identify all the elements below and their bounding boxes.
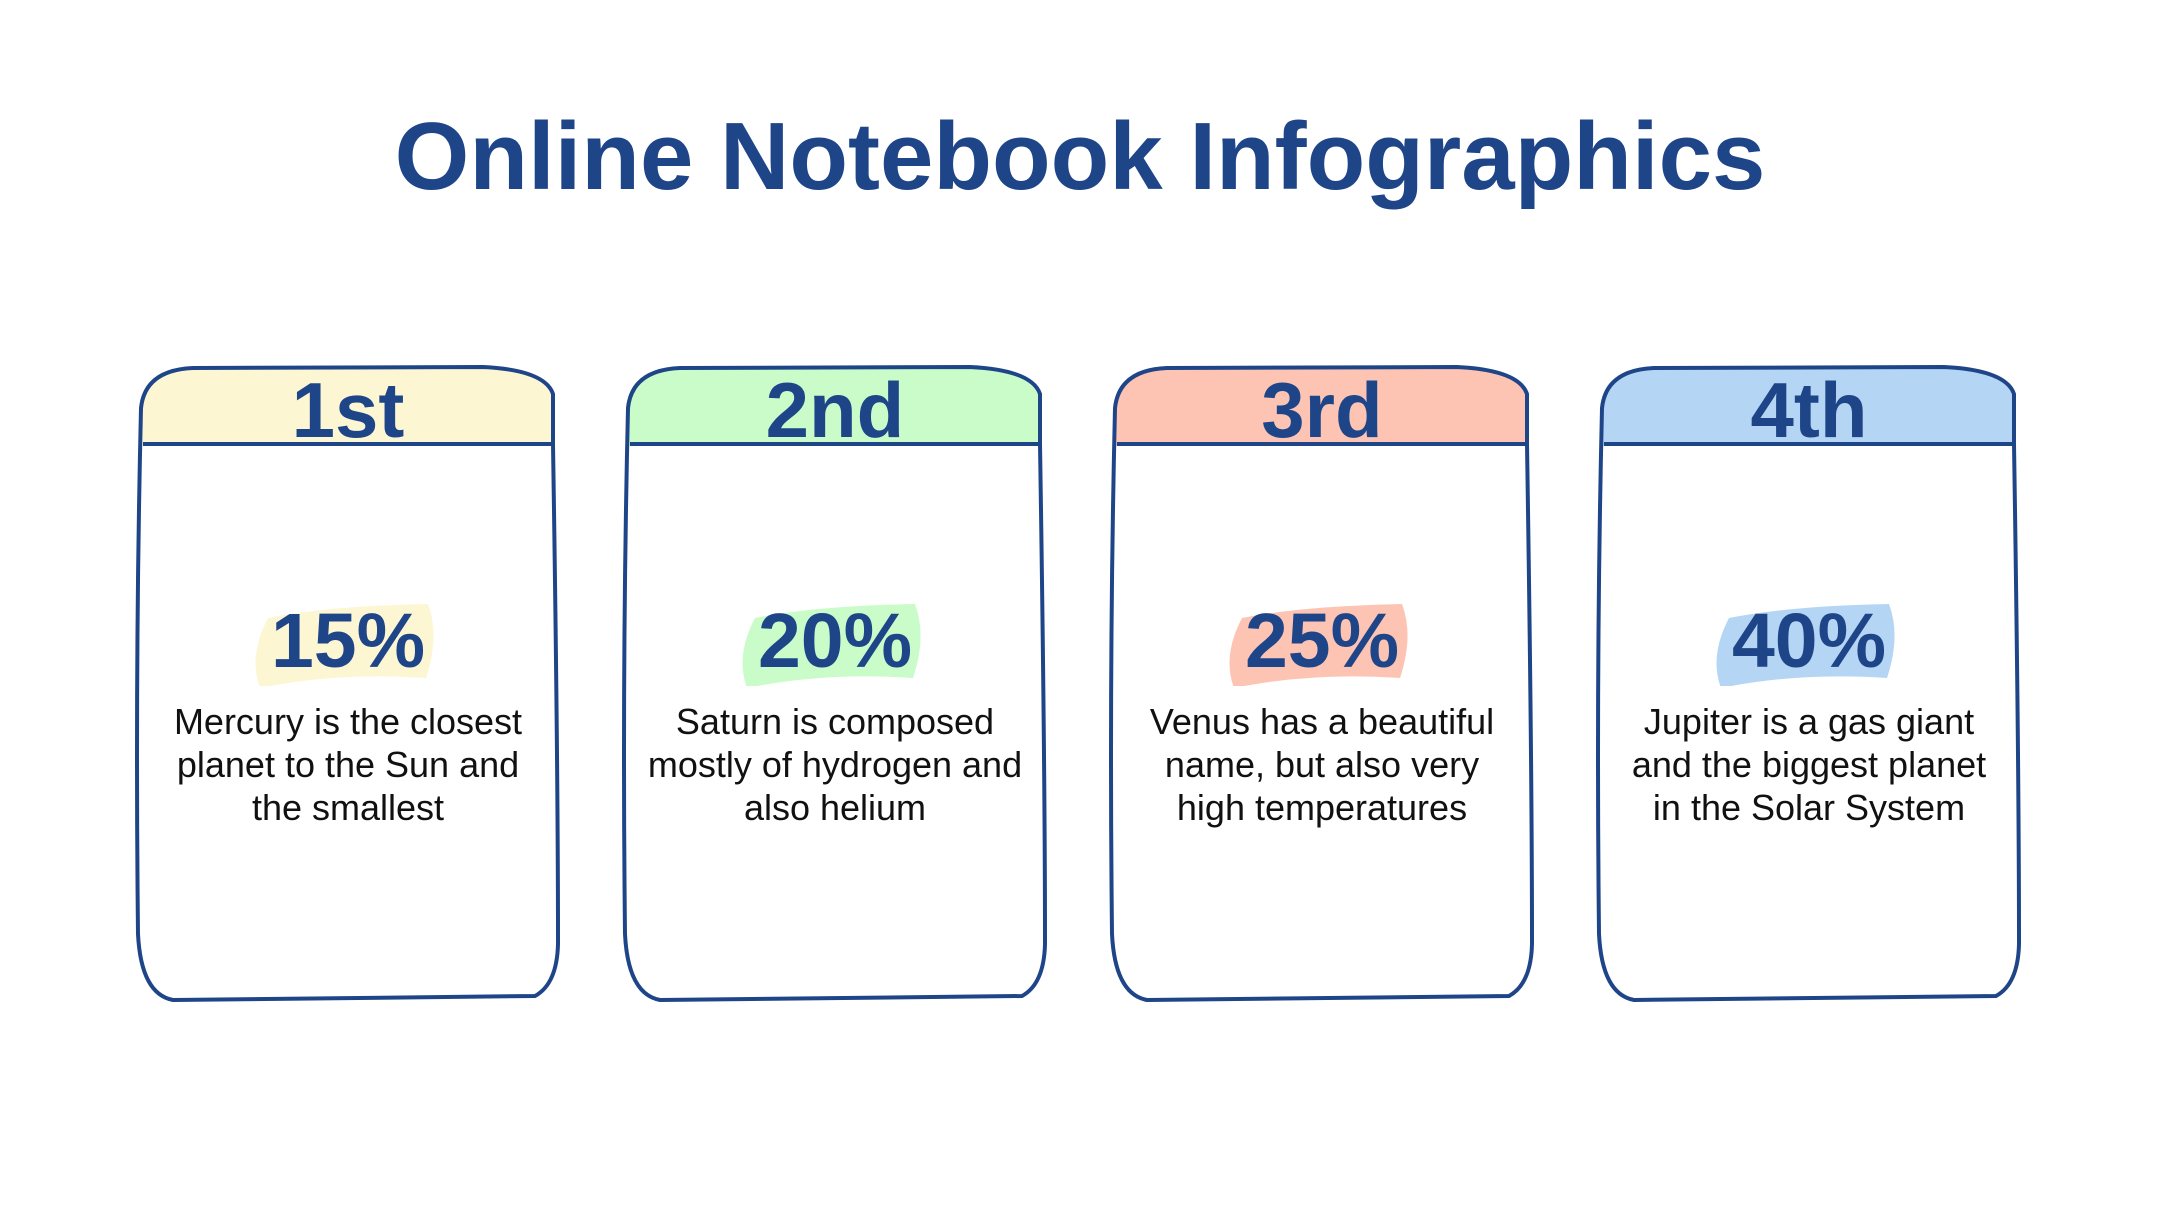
text: description 2: Saturn is composed mostly of hydrogen and also helium [648,701,1022,828]
text: description 3: Venus has a beautiful name, but also very high temperatures [1150,701,1494,828]
text: description 4: Jupiter is a gas giant and the biggest planet in the Solar System [1632,701,1986,828]
panel: 1st: 1st [292,366,404,454]
panel: 1st [135,365,560,1002]
text: description 1: Mercury is the closest planet to the Sun and the smallest [174,701,522,828]
stat: 15%: 15% [271,598,425,684]
title: Online Notebook Infographics [395,103,1765,210]
stat: 40%: 40% [1732,598,1886,684]
panel: 2nd [622,365,1047,1002]
panel: 4th: 4th [1750,366,1868,454]
panel: 4th [1596,365,2021,1002]
stat: 25%: 25% [1245,598,1399,684]
panel: 3rd: 3rd [1261,366,1383,454]
panel: 2nd: 2nd [766,366,904,454]
panel: 3rd [1109,365,1534,1002]
stat: 20%: 20% [758,598,912,684]
